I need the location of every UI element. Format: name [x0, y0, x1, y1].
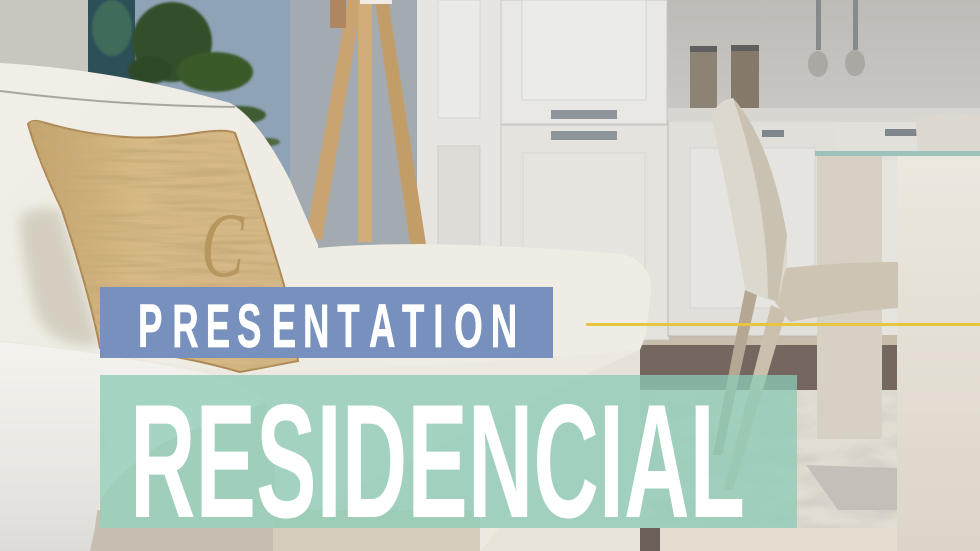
- white leather sofa: [0, 63, 651, 551]
- dining table and chair: [711, 98, 980, 551]
- tripod floor lamp: [306, 0, 426, 244]
- gold cushion: [25, 115, 305, 375]
- accent line: [586, 323, 980, 326]
- heading: presentation: PRESENTATION: [138, 291, 517, 360]
- cushion monogram: C: [201, 195, 245, 297]
- title band: residencial: [100, 371, 797, 551]
- shadow behind cushion: [20, 208, 100, 345]
- kitchen cabinets: [417, 0, 980, 340]
- jars and utensils: [690, 0, 865, 108]
- plant: [92, 0, 280, 146]
- title band: presentation: [100, 287, 553, 360]
- sofa arm: [0, 342, 265, 551]
